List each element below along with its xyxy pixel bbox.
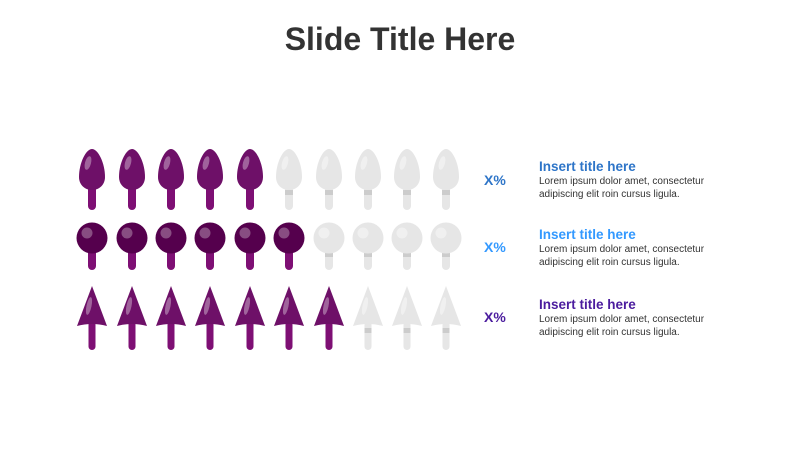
text block 2 <box>539 227 704 268</box>
title: Slide Title Here <box>285 21 515 57</box>
text block 1: Insert title here <box>539 159 636 174</box>
text block 3 <box>539 297 704 338</box>
text block 3: Lorem ipsum dolor amet, consectetur adipiscing elit roin cursus ligula. <box>539 314 704 338</box>
row 1: drops <box>79 149 459 210</box>
text block 2: Insert title here <box>539 227 636 242</box>
percent 1: X% <box>484 172 506 188</box>
percent 2: X% <box>484 239 506 255</box>
row 3: triangles <box>77 286 461 350</box>
text block 3: Insert title here <box>539 297 636 312</box>
text block 2: Lorem ipsum dolor amet, consectetur adipiscing elit roin cursus ligula. <box>539 244 704 268</box>
text block 1 <box>539 159 704 200</box>
text block 1: Lorem ipsum dolor amet, consectetur adipiscing elit roin cursus ligula. <box>539 176 704 200</box>
percent 3: X% <box>484 309 506 325</box>
row 2: circles <box>76 222 462 270</box>
